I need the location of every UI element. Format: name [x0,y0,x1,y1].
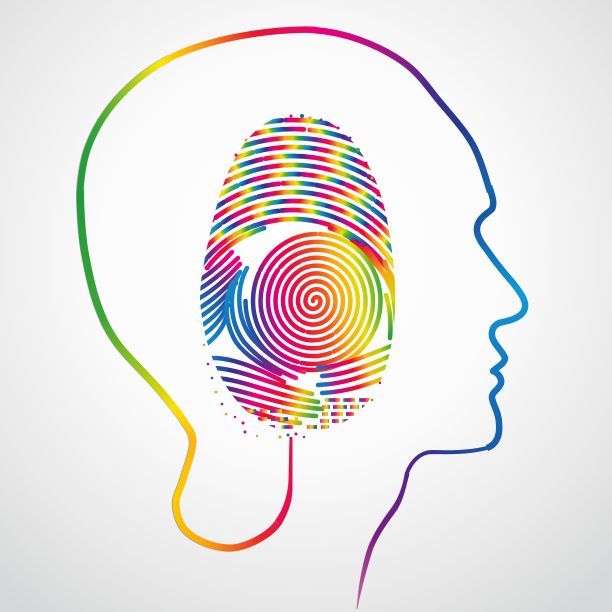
scattered top dots [234,114,380,196]
fingerprint [200,114,396,438]
fingerprint ridges: clipped body [200,118,396,429]
head outline [80,30,525,609]
head: jaw [407,447,490,473]
head: bottom curve to fingerprint [176,501,278,548]
upper arches [203,118,396,289]
right diagonal ridges [352,241,398,338]
scattered bottom dots [203,344,381,438]
head: lower back loop [176,441,193,503]
whorl spiral [246,234,380,370]
head: face profile [477,186,525,448]
lower dashes [246,400,380,427]
lower-left ridges [213,358,322,423]
head: top left arc [80,30,316,197]
head: neck tail [356,472,410,609]
head edge shadow [80,58,277,548]
lower-right ridges [318,345,394,393]
left loop ridges around whorl [227,268,304,378]
head: top right arc [313,30,490,192]
stem joining fingerprint [275,437,292,526]
head: left side [80,190,193,443]
left diagonal ridges [196,252,240,347]
